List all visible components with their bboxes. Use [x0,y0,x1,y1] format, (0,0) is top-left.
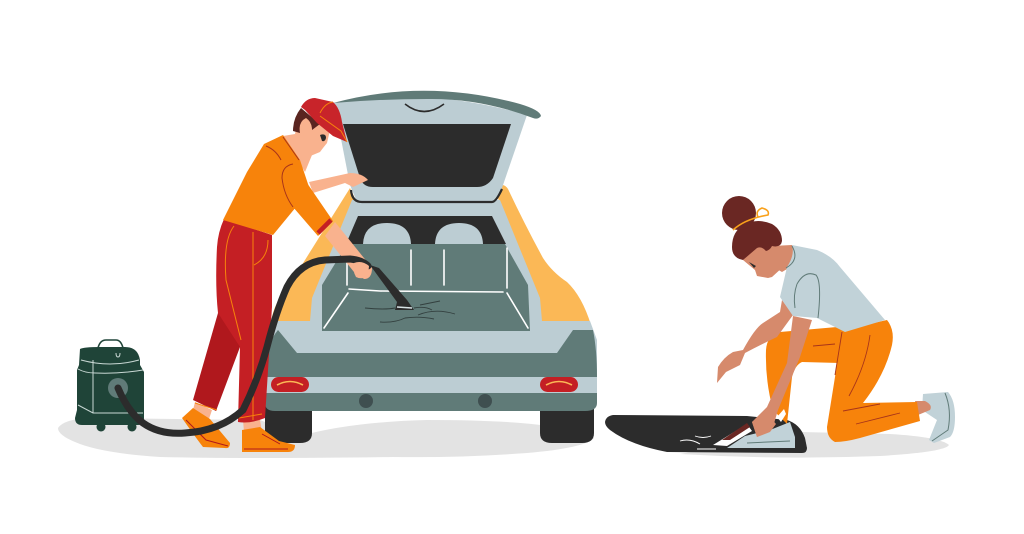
vacuum cleaner [75,340,144,432]
hair [732,221,782,260]
tool brush [713,424,752,446]
car body [265,200,597,377]
cuff [318,220,331,233]
hair band [733,208,768,230]
car yellow side panels [271,185,591,325]
front arm [752,316,812,437]
back leg [193,290,248,411]
right shoe [242,427,295,452]
shirt [223,135,310,235]
far arm [309,173,368,193]
cap [301,98,347,142]
headrests [363,223,483,244]
tail light left [271,377,309,392]
hose tube [118,259,368,433]
near forearm [325,222,372,279]
neck [283,134,312,172]
exhaust circles [359,394,492,408]
back shoe [922,392,955,443]
wheels [96,422,136,432]
wand and nozzle [370,265,414,310]
back arm [717,300,793,383]
hose port [108,378,128,398]
back shoe line [932,393,949,441]
tail light right [540,377,578,392]
nozzle highlight [397,307,412,308]
hand [752,417,776,437]
car [265,91,597,443]
face [295,112,331,157]
shirt [780,245,885,332]
ground shadow: car and man [58,418,594,458]
shoe lines [186,420,288,449]
hair [293,108,320,133]
trunk lid [334,97,527,202]
rug [605,415,807,453]
lid lower edge [351,189,502,202]
trunk interior [322,244,530,331]
left shoe [182,408,230,448]
teal bumper [265,330,597,411]
front foot shoe [727,422,795,448]
tool dark handle [722,423,750,440]
pants lines [813,332,900,424]
front thigh and shin [766,327,842,424]
rug marks [680,436,716,449]
ground shadow: woman [680,432,949,458]
cap lines [320,102,347,142]
body lines [78,360,143,413]
pants lines [195,226,268,420]
man [182,98,372,452]
hair bun [722,196,756,230]
lid top strip [333,91,541,119]
body [75,347,144,425]
face [743,246,784,278]
dirt marks [365,301,455,322]
shoe stripe [747,441,790,443]
neck [772,245,797,272]
back ankle [915,401,931,415]
rear window [346,216,506,244]
ankles [192,402,262,432]
eye [749,262,756,268]
latch glyph [116,353,120,357]
car wheels [265,405,594,443]
light band [265,377,597,393]
eye [320,134,326,141]
handle [98,340,123,348]
sleeve [282,163,333,236]
lid handle [405,104,444,112]
white cloth [777,409,786,422]
front leg [216,219,272,422]
shirt lines [786,246,820,318]
trunk lines [324,248,528,328]
lid window [343,124,511,187]
vacuum hose [118,259,414,433]
shirt lines [266,137,299,207]
woman [713,196,955,448]
back leg [827,320,920,442]
man's hand [353,262,369,278]
